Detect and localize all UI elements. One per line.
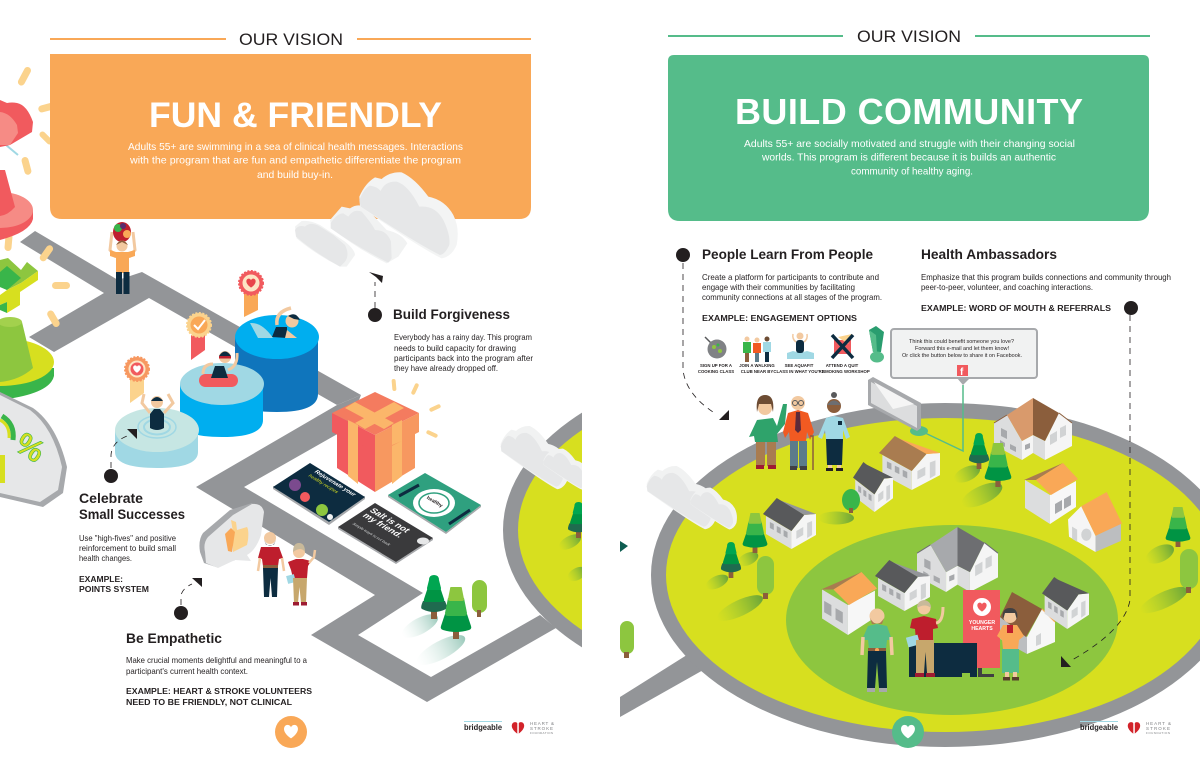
swimmer in red float [199,351,238,387]
logos: FOUNDATION [530,731,553,735]
title: build community: BUILD COMMUNITY [735,91,1083,132]
volunteer woman [286,543,315,606]
ribbon badge: arrow [125,357,149,403]
icon: heart button [275,716,307,748]
icon: green plus [0,258,38,313]
intro text: community of healthy aging. [851,166,973,178]
text: health ambassadors [921,247,1171,315]
option labels: SMOKING WORKSHOP [822,369,870,374]
card: green plate: healthy [425,495,444,509]
card: salt is not my friend [338,503,433,564]
houses: upper village [763,398,1122,552]
logos: FOUNDATION [1146,731,1170,735]
house: big grey [917,527,998,592]
sprinkles [4,66,70,328]
text: be empathetic: NEED TO BE FRIENDLY, NOT CLINICAL [126,698,292,707]
icon: no smoking cross [832,334,853,358]
house: brown and orange [879,436,940,490]
text: build forgiveness: Everybody has a rainy day. This program [394,332,532,342]
option labels: COOKING CLASS [698,369,734,374]
link line [923,385,963,451]
option labels: ATTEND A QUIT [826,363,859,368]
text: build forgiveness: Build Forgiveness [393,307,510,322]
intro text: Adults 55+ are swimming in a sea of clinical health messages. Interactions [128,141,463,153]
blue cylinder [235,315,319,412]
text: build forgiveness: needs to build capacity for drawing [394,343,516,353]
text: build forgiveness [368,307,533,373]
text: people learn from people: community connections at all stages of the program. [702,292,882,302]
small map fragments [620,541,634,658]
logos [464,720,554,736]
text: celebrate small successes: POINTS SYSTEM [79,585,149,594]
pointer dot [368,308,382,322]
gift sparkles [391,379,441,438]
card: navy recipe: Rejuvenate your [312,470,358,498]
text: celebrate small successes: Small Successes [79,507,185,522]
text: celebrate small successes: Celebrate [79,491,144,506]
panel: build community [620,28,1200,748]
logos: HEART & [1146,721,1171,726]
text: be empathetic: participant's current health context. [126,666,248,676]
callout: share message: f [960,367,964,378]
logos: STROKE [530,726,553,731]
house: orange gable [1068,492,1122,552]
intro text [128,141,463,181]
text: celebrate small successes: reinforcement to build small [79,543,176,553]
house: dark roof small [853,462,893,512]
text: health ambassadors: peer-to-peer, volunteer, and coaching interactions. [921,282,1093,292]
option labels: CLUB NEAR BY [741,369,773,374]
icon: envelope [868,377,928,436]
logos: STROKE [1146,726,1170,731]
text: celebrate small successes: EXAMPLE: [79,575,123,584]
clouds [647,466,737,530]
orange title panel [50,54,531,219]
text: people learn from people: EXAMPLE: ENGAGEMENT OPTIONS [702,314,858,323]
engagement icons [698,332,870,374]
arrow: celebrate pointer [111,429,137,468]
text: people learn from people: People Learn From People [702,247,873,262]
houses: central cluster [821,527,1089,654]
text: be empathetic: Be Empathetic [126,631,222,646]
callout: share message [891,329,1037,385]
middle cylinder [180,363,264,437]
icon: heart button [892,716,924,748]
intro text: and build buy-in. [257,169,333,181]
icon: green cone [0,317,54,400]
house: dark roof left [763,498,816,549]
text: health ambassadors: Health Ambassadors [921,247,1057,262]
text: be empathetic [126,606,313,707]
younger hearts banner: YOUNGER [969,620,995,626]
card: green plate [388,473,481,534]
callout: share message: Think this could benefit someone you love? [909,339,1015,345]
arrow: ambassadors pointer [1061,315,1130,667]
house: dark roof mid [875,560,930,611]
arrow: people pointer [683,263,729,420]
intro text: Adults 55+ are socially motivated and struggle with their changing social [744,138,1075,150]
option labels: SEE AQUAFIT [785,363,814,368]
community ring map edge [503,412,582,648]
tree at map edge [560,502,582,581]
logos: bridgeable [1080,722,1118,732]
person holding food basket [110,222,135,294]
text: be empathetic: EXAMPLE: HEART & STROKE VOLUNTEERS [126,687,313,696]
panel: fun and friendly [0,34,582,748]
callout: share message: Or click the button below to share it on Facebook. [902,353,1022,359]
title: fun and friendly: FUN & FRIENDLY [149,96,442,135]
text: celebrate small successes: Use "high-fives" and positive [79,533,176,543]
road to community [620,653,705,717]
light cylinder [115,408,199,468]
logos: HEART & [530,721,554,726]
community lawn [666,418,1200,732]
icon: red cone [0,170,33,240]
television display [909,643,994,677]
volunteer: man in green [862,608,892,692]
icon: green exclamation [869,326,884,362]
ribbon badge: heart [239,271,263,317]
option labels: CLASS IN WHAT YOU'RE [773,369,825,374]
community ring road [651,403,1200,747]
card: salt is not my friend: my friend. [360,512,406,539]
intro text: worlds. This program is different because it is builds an authentic [761,152,1056,164]
callout: share message: Forward this e-mail and let them know! [915,346,1009,352]
volunteer man [258,532,284,597]
icon: three walkers [743,336,771,362]
icon: skillet [705,337,726,358]
text: people learn from people: engage with their communities by facilitating [702,282,855,292]
heading: our vision: OUR VISION [857,28,961,46]
gift box [332,392,419,492]
logos: bridgeable [464,722,502,732]
participant: man in orange [783,396,814,470]
speech bubble: thumbs up [199,503,264,568]
clouds at map edge [501,426,589,490]
text: celebrate small successes: health changes. [79,553,132,563]
trees and shrubs [704,433,1198,626]
option labels [698,363,870,374]
intro text [744,138,1075,178]
pine trees and bush [406,575,487,664]
house: dark roof right [1042,577,1089,629]
text: health ambassadors: Emphasize that this program builds connections and community through [921,272,1171,282]
road network [20,231,556,702]
text: build forgiveness: they have already dropped off. [394,363,498,373]
text: be empathetic: Make crucial moments delightful and meaningful to a [126,655,307,665]
inner green [786,525,1118,715]
text: build forgiveness: participants back into the program after [394,353,533,363]
younger hearts banner [963,590,1000,668]
house: big brown [994,398,1072,460]
icon: aquafit [787,332,814,359]
swimmer waving in water [142,394,173,430]
icon: percent speech bubble: % [9,425,51,470]
arrow: build forgiveness pointer [369,272,383,308]
card: salt is not my friend: Salt is not [367,507,413,534]
house: orange right [1024,463,1078,524]
swimmer on blue cylinder [250,308,300,338]
text: people learn from people [676,247,882,323]
clouds [295,172,458,267]
text: celebrate small successes [79,469,185,594]
younger hearts banner: HEARTS [971,626,993,632]
card: navy recipe [273,463,365,525]
card: salt is not my friend: Simple ways to cut back [351,522,392,546]
logos [1080,720,1171,736]
green title panel [668,55,1149,221]
intro text: with the program that are fun and empathetic differentiate the program [129,154,461,166]
option labels: SIGN UP FOR A [700,363,732,368]
text: people learn from people: Create a platform for participants to contribute and [702,272,879,282]
volunteer: woman with mug [997,608,1024,680]
card: navy recipe: healthy recipes [306,474,340,495]
arrow: empathetic pointer [181,578,202,605]
house: orange left [821,572,877,635]
participant: woman in blue [818,392,850,471]
house: brown [1000,592,1055,654]
icon: percent speech bubble [0,392,67,507]
volunteer: man in red [906,600,943,677]
ribbon badge: check [187,313,211,360]
icon: red heart pin [0,100,33,155]
option labels: JOIN A WALKING [739,363,775,368]
heading: our vision: OUR VISION [239,31,343,49]
text: health ambassadors: EXAMPLE: WORD OF MOUTH & REFERRALS [921,304,1112,313]
participant: woman in green [749,395,787,469]
